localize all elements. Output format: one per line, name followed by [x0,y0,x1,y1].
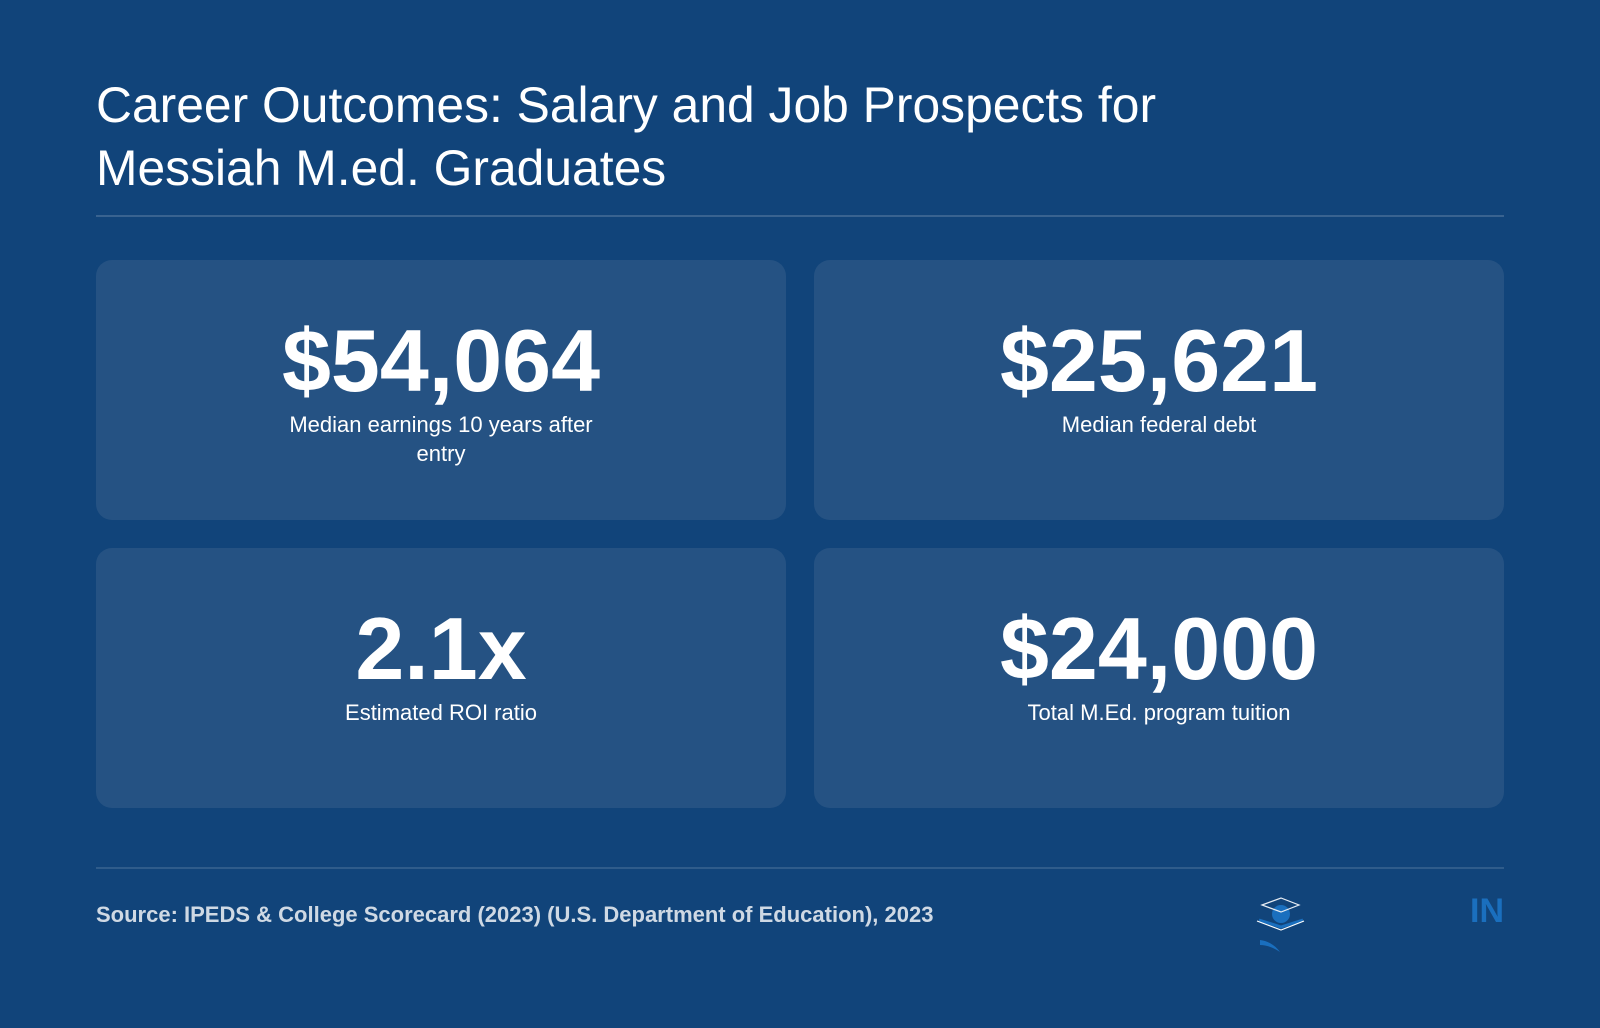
panel: median debt [814,260,1504,520]
title [96,77,1156,196]
icon: graduation cap logo [1256,897,1304,952]
source text: Source: IPEDS & College Scorecard (2023) (U.S. Department of Education), 2023 [96,902,933,927]
title: Messiah M.ed. Graduates [96,140,666,196]
label: median earnings: Median earnings 10 years after [289,412,593,437]
label: median earnings [289,412,593,466]
title: Career Outcomes: Salary and Job Prospects for [96,77,1156,133]
label: tuition: Total M.Ed. program tuition [1028,700,1290,725]
value: ROI: 2.1x [355,599,527,698]
label: median earnings: entry [417,441,465,466]
value: median debt: $25,621 [1000,311,1318,410]
label: median debt: Median federal debt [1062,412,1256,437]
value: median earnings: $54,064 [282,311,600,410]
logo text: IN: IN [1470,892,1504,930]
panel: median earnings [96,260,786,520]
panel: ROI [96,548,786,808]
panel: tuition [814,548,1504,808]
label: ROI: Estimated ROI ratio [345,700,537,725]
value: tuition: $24,000 [1000,599,1318,698]
